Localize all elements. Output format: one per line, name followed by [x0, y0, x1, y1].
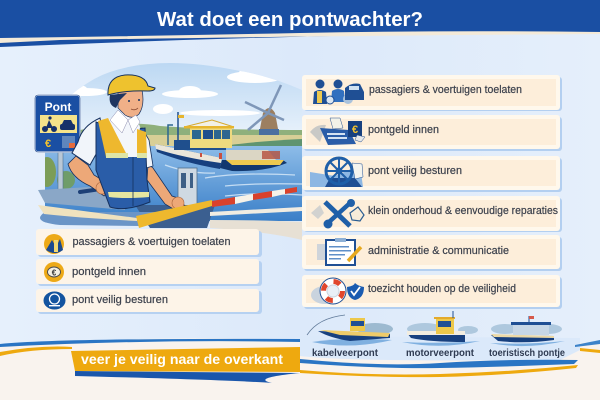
river: [40, 146, 305, 221]
left task cards: [36, 229, 262, 314]
card: besturen: [36, 289, 262, 314]
label: toeristisch pontje: toeristisch pontje: [489, 348, 565, 359]
icon: [313, 80, 364, 104]
card 5: [302, 235, 562, 271]
icon: [310, 118, 365, 145]
title: Wat doet een pontwachter?: [157, 9, 423, 31]
windmill: [245, 85, 284, 135]
ferry types: [307, 311, 565, 359]
icon: clipboard: [317, 238, 361, 265]
footer: [0, 336, 600, 400]
ribbon: slogan: veer je veilig naar de overkant: [81, 351, 283, 367]
icon: tools: [311, 199, 364, 228]
boat: motorveerpont: [402, 311, 480, 346]
icon: €: [352, 124, 358, 136]
bushes: [45, 157, 56, 187]
icon: [310, 158, 363, 187]
card: pontgeld: [36, 259, 262, 286]
card 1: [302, 75, 562, 111]
card: passagiers: [36, 229, 262, 257]
boat: kabelveerpont: [307, 315, 393, 346]
barrier: [136, 187, 302, 240]
card 2: pontgeld innen: [368, 124, 439, 136]
right task cards: [302, 75, 562, 309]
card: passagiers: passagiers & voertuigen toelaten: [72, 236, 230, 248]
shirt sleeves: [72, 118, 104, 165]
head: [118, 90, 143, 117]
card 4: klein onderhoud & eenvoudige reparaties: [368, 205, 558, 217]
face: [128, 100, 130, 102]
ribbon: slogan: [71, 347, 300, 383]
railing and deck: [38, 168, 215, 228]
card 6: [302, 275, 562, 309]
card 1: passagiers & voertuigen toelaten: [369, 84, 522, 96]
helmet: [108, 75, 155, 95]
label: kabelveerpont: kabelveerpont: [312, 348, 379, 359]
card 6: toezicht houden op de veiligheid: [368, 283, 516, 295]
sign: Pont: [35, 95, 80, 190]
collar: [110, 110, 128, 133]
card 3: pont veilig besturen: [368, 165, 462, 177]
clouds: [72, 71, 277, 116]
sign: Pont: €: [45, 138, 51, 150]
far shore: [80, 124, 302, 135]
card 5: administratie & communicatie: [368, 245, 509, 257]
card 4: [302, 196, 562, 232]
ferry: [155, 112, 287, 171]
person: ferry operator: [68, 75, 185, 210]
boat: toeristisch pontje: [490, 316, 565, 346]
label: motorveerpont: motorveerpont: [406, 348, 475, 359]
illustration: ferry operator scene: [30, 55, 310, 240]
header banner: [0, 0, 600, 47]
card 3: [302, 156, 562, 192]
card: pontgeld: €: [52, 268, 57, 278]
icon: lifebuoy and shield: [311, 278, 364, 304]
sign: Pont: Pont: [45, 100, 71, 114]
vest: [96, 122, 150, 209]
card: pontgeld: pontgeld innen: [72, 266, 146, 278]
arms: [68, 156, 112, 196]
card: besturen: pont veilig besturen: [72, 294, 168, 306]
card 2: [302, 115, 562, 151]
